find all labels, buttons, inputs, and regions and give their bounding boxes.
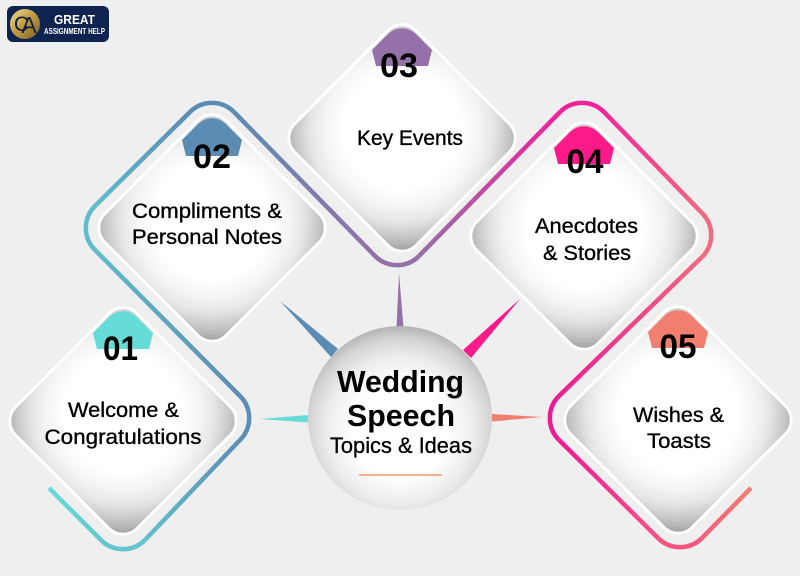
central circle: Wedding Speech Topics & Ideas: Speech — [347, 398, 455, 433]
logo: Great Assignment Help — [7, 6, 109, 42]
panel: 01 Welcome & Congratulations: Welcome & — [68, 398, 179, 422]
panel: 02 Compliments & Personal Notes — [99, 115, 325, 341]
panel: 03 Key Events — [289, 25, 515, 251]
panel: 01 Welcome & Congratulations — [10, 308, 236, 534]
spike: salmon to 05 — [492, 414, 542, 422]
logo: Great Assignment Help: A — [21, 12, 37, 38]
central circle: Wedding Speech Topics & Ideas: Wedding — [337, 364, 464, 399]
panel: 02 Compliments & Personal Notes: Compliments & — [132, 199, 282, 223]
spike: pink to 04 — [463, 299, 520, 358]
panel: 05 Wishes & Toasts: Wishes & — [633, 403, 724, 427]
panel: 04 Anecdotes & Stories: 04 — [566, 143, 604, 181]
panel: 01 Welcome & Congratulations: Congratulations — [44, 425, 202, 449]
panel: 04 Anecdotes & Stories: Anecdotes — [535, 214, 638, 238]
logo: Great Assignment Help: ASSIGNMENT HELP — [44, 26, 105, 36]
logo: Great Assignment Help: GREAT — [54, 12, 95, 27]
panel: 05 Wishes & Toasts: Toasts — [647, 429, 711, 453]
panel: 04 Anecdotes & Stories: & Stories — [543, 241, 631, 265]
panel: 03 Key Events: Key Events — [357, 126, 463, 150]
spike: teal to 01 — [260, 415, 308, 422]
panel: 05 Wishes & Toasts — [565, 307, 791, 533]
central circle: Wedding Speech Topics & Ideas: Topics & Ideas — [330, 433, 472, 458]
panel: 04 Anecdotes & Stories — [471, 123, 697, 349]
panel: 03 Key Events: 03 — [380, 47, 418, 85]
spike: blue to 02 — [280, 301, 338, 357]
panel: 02 Compliments & Personal Notes: 02 — [193, 138, 231, 176]
panel: 01 Welcome & Congratulations: 01 — [103, 330, 138, 368]
spike: purple to 03 — [396, 273, 404, 328]
panel: 05 Wishes & Toasts: 05 — [660, 328, 696, 366]
central circle: Wedding Speech Topics & Ideas — [308, 326, 492, 510]
logo: Great Assignment Help: C — [14, 13, 29, 36]
panel: 02 Compliments & Personal Notes: Personal Notes — [132, 225, 282, 249]
serpentine gradient outline around the diamonds — [49, 103, 751, 549]
